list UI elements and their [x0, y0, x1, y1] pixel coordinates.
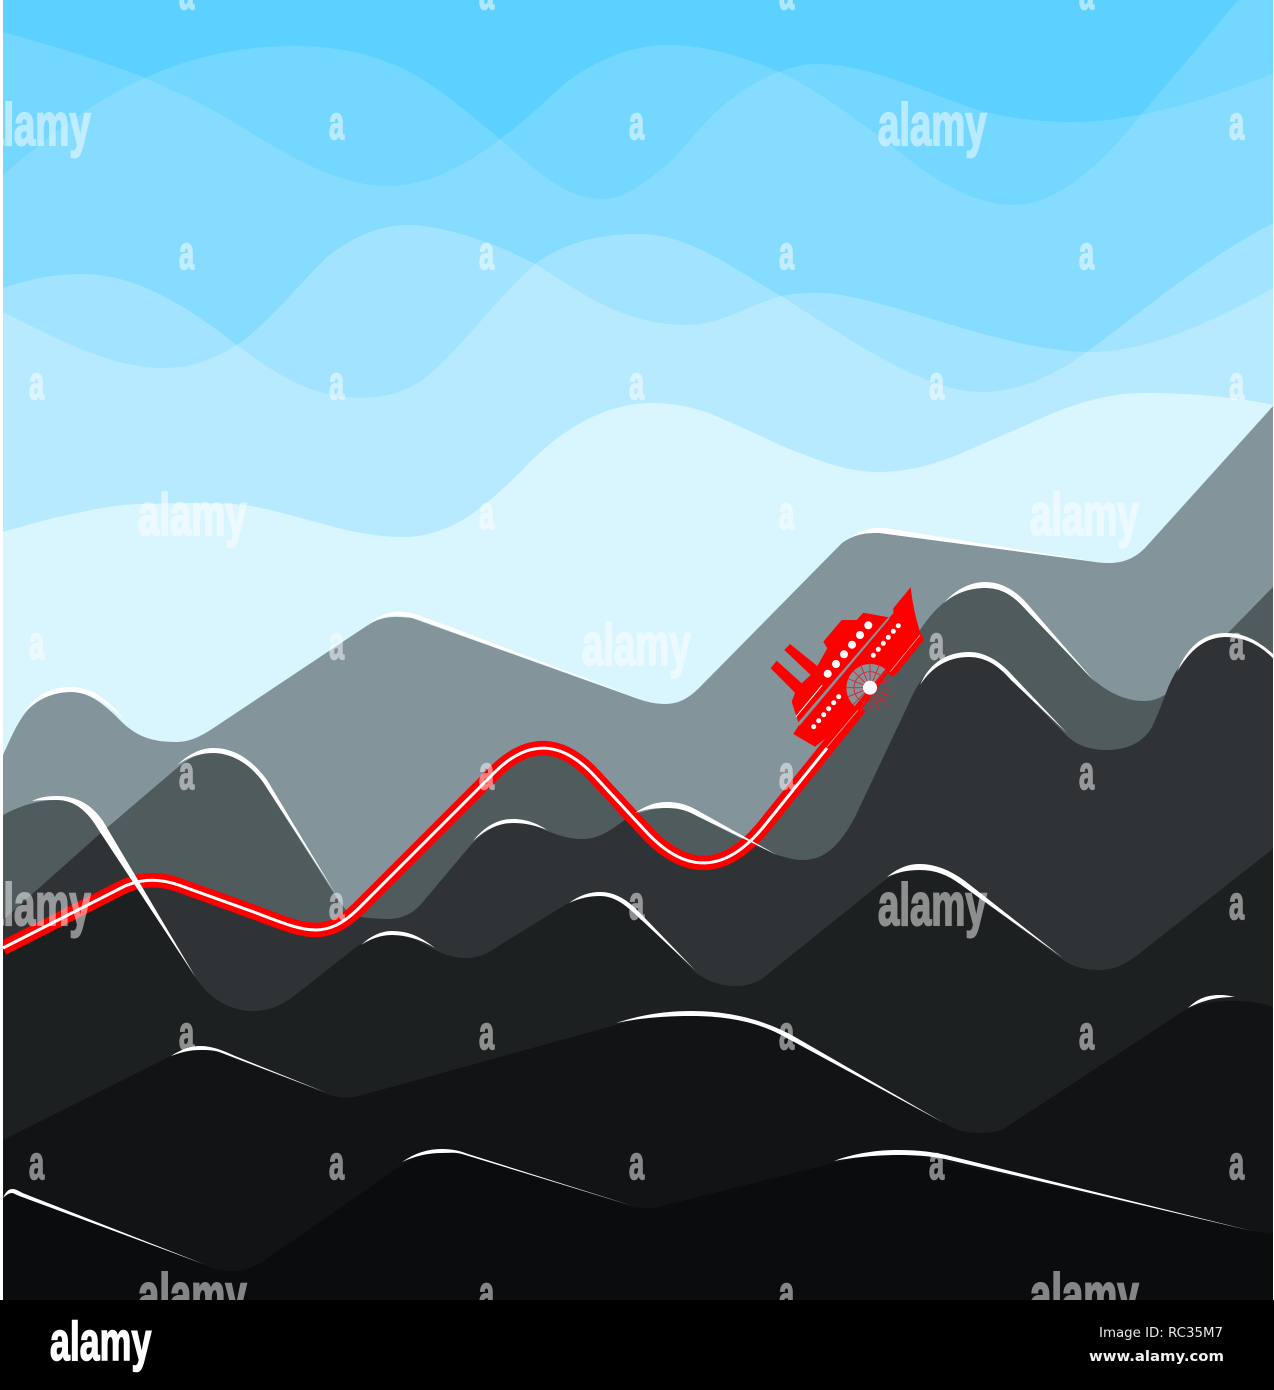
paddle wheel	[846, 664, 894, 712]
alamy watermark pattern: alamy	[138, 1262, 247, 1328]
alamy watermark pattern: a	[629, 97, 645, 150]
alamy watermark pattern: a	[1079, 1007, 1095, 1060]
alamy watermark pattern: a	[1229, 617, 1245, 670]
alamy watermark pattern: alamy	[1030, 1262, 1139, 1328]
alamy watermark pattern: a	[479, 227, 495, 280]
alamy watermark pattern: a	[779, 1007, 795, 1060]
alamy watermark pattern: a	[329, 97, 345, 150]
mountain layers	[3, 405, 1274, 1390]
image id: Image ID: RC35M7	[1099, 1325, 1223, 1341]
alamy watermark pattern: alamy	[1030, 482, 1139, 548]
alamy watermark pattern: a	[1229, 1137, 1245, 1190]
alamy watermark pattern: a	[179, 227, 195, 280]
alamy watermark pattern: a	[479, 747, 495, 800]
website: www.alamy.com	[1089, 1349, 1224, 1365]
alamy watermark pattern: a	[29, 617, 45, 670]
alamy watermark pattern: a	[779, 487, 795, 540]
alamy watermark pattern: alamy	[878, 92, 987, 158]
portholes	[811, 621, 901, 729]
alamy watermark pattern: a	[29, 1137, 45, 1190]
alamy watermark pattern: alamy	[138, 482, 247, 548]
alamy watermark pattern: alamy	[582, 612, 691, 678]
alamy watermark pattern: a	[929, 617, 945, 670]
alamy watermark pattern: a	[1079, 747, 1095, 800]
alamy watermark pattern: a	[1229, 877, 1245, 930]
alamy watermark pattern: a	[929, 357, 945, 410]
alamy watermark pattern: a	[479, 1267, 495, 1320]
deck lines	[796, 618, 920, 747]
white ridge highlights	[3, 528, 1274, 1265]
alamy watermark pattern: a	[179, 747, 195, 800]
alamy watermark pattern: a	[179, 1007, 195, 1060]
ship hull and bow	[793, 587, 924, 747]
alamy watermark pattern: a	[329, 357, 345, 410]
alamy watermark pattern: a	[779, 747, 795, 800]
alamy watermark pattern: a	[1229, 97, 1245, 150]
alamy watermark pattern: a	[629, 1137, 645, 1190]
red track line	[3, 707, 860, 948]
alamy watermark pattern: a	[29, 357, 45, 410]
alamy watermark pattern: a	[479, 487, 495, 540]
bottom credit bar	[0, 1300, 1274, 1390]
alamy logo: alamy	[50, 1310, 152, 1372]
alamy watermark pattern: a	[329, 877, 345, 930]
ship superstructure and funnels	[771, 613, 888, 722]
alamy watermark pattern: a	[1079, 227, 1095, 280]
alamy watermark pattern: alamy	[878, 872, 987, 938]
icon: red paddle steamer ship	[771, 587, 924, 747]
alamy watermark pattern: a	[779, 1267, 795, 1320]
alamy watermark pattern: a	[929, 1137, 945, 1190]
alamy watermark pattern: a	[1229, 357, 1245, 410]
alamy watermark pattern: a	[629, 877, 645, 930]
alamy watermark pattern: a	[629, 357, 645, 410]
alamy watermark pattern: a	[479, 1007, 495, 1060]
alamy watermark pattern: a	[779, 227, 795, 280]
alamy watermark pattern: a	[329, 617, 345, 670]
alamy watermark pattern: a	[329, 1137, 345, 1190]
